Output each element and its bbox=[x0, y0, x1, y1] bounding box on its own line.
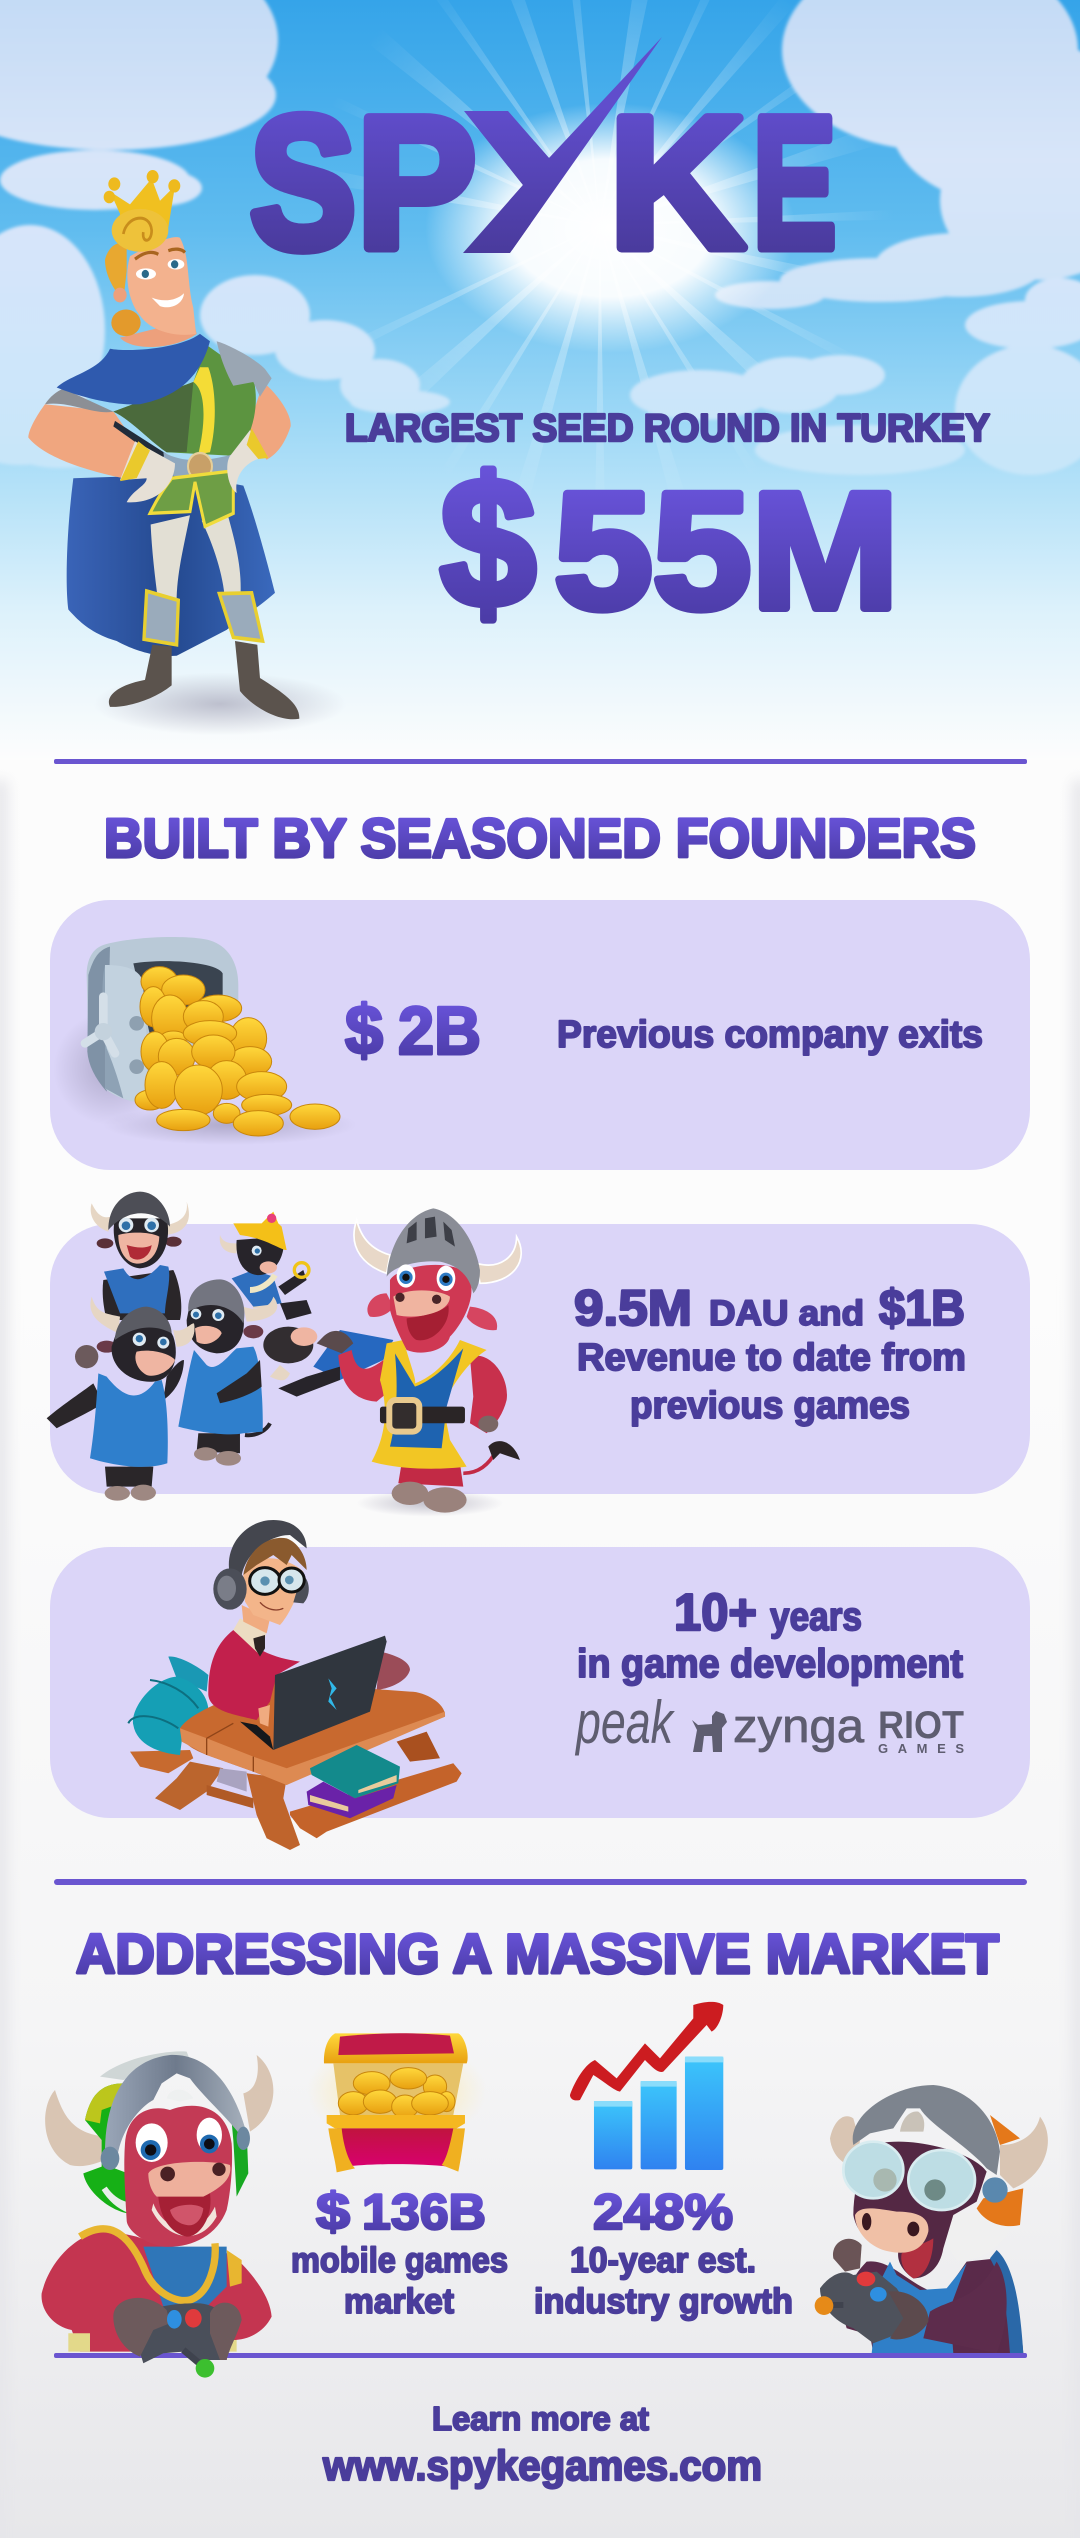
label: mobile games market bbox=[291, 2241, 508, 2321]
logo: SPYKE: P bbox=[356, 78, 476, 288]
logo: SPYKE bbox=[250, 37, 835, 255]
icon: treasure chest bbox=[307, 2033, 487, 2172]
collar and tie bbox=[233, 1618, 267, 1655]
icon: safe with gold coins bbox=[53, 937, 357, 1145]
icon: controller held by red bull bbox=[113, 2298, 242, 2378]
label: previous games: previous games bbox=[630, 1385, 910, 1427]
footer: website url: www.spykegames.com bbox=[322, 2442, 762, 2489]
divider line bbox=[54, 1879, 1027, 1885]
illustration: red pilot bull body bbox=[42, 2051, 273, 2352]
clouds bbox=[0, 0, 1080, 475]
backpack bbox=[168, 1656, 208, 1692]
logo: SPYKE: K bbox=[609, 78, 745, 288]
arms bbox=[28, 404, 148, 478]
stat: $2B: $ bbox=[345, 991, 383, 1069]
illustration: king character bbox=[28, 170, 347, 735]
cape bbox=[67, 474, 275, 656]
stat: 10+ years: years bbox=[770, 1595, 862, 1639]
label: revenue to date: Revenue to date from bbox=[577, 1337, 966, 1379]
label: mobile games market: mobile games bbox=[291, 2241, 508, 2280]
legs bbox=[151, 515, 241, 602]
stat line: DAU and revenue: $1B bbox=[879, 1280, 965, 1336]
big number: $55M bbox=[440, 439, 899, 645]
bull: red knight bbox=[317, 1208, 521, 1517]
illustration: developer at picnic table bbox=[128, 1520, 462, 1850]
belt bbox=[163, 452, 237, 477]
logo: SPYKE: S bbox=[250, 78, 356, 288]
stat: $2B: 2B bbox=[398, 993, 481, 1069]
stat: 10+ years bbox=[674, 1584, 862, 1642]
stat: $136B: $ bbox=[316, 2183, 350, 2241]
logo: Riot Games: RIOT bbox=[878, 1704, 964, 1747]
logo: Riot Games: GAMES bbox=[878, 1741, 964, 1756]
label: mobile games market: market bbox=[344, 2282, 454, 2321]
icon: rising bar chart bbox=[570, 2002, 723, 2170]
boots bbox=[109, 641, 299, 719]
label: industry growth: 10-year est. bbox=[570, 2241, 756, 2280]
logo: SPYKE: E bbox=[752, 78, 836, 288]
panel: previous exits bbox=[50, 900, 1030, 1170]
panel: years in game development bbox=[50, 1520, 1030, 1850]
divider line bbox=[54, 2353, 1027, 2358]
bull: front black bbox=[47, 1297, 194, 1501]
bull: small crowned bbox=[220, 1212, 312, 1320]
gloves bbox=[120, 441, 175, 502]
heading: addressing a massive market: ADDRESSING A MASSIVE MARKET bbox=[76, 1922, 999, 1985]
panel: DAU and revenue bbox=[47, 1192, 1030, 1517]
label: industry growth: industry growth bbox=[534, 2282, 793, 2321]
tunic skirt bbox=[150, 471, 233, 526]
stat: 248%: 248% bbox=[593, 2184, 733, 2240]
illustration: five bulls bbox=[47, 1192, 521, 1517]
label: previous company exits: Previous company exits bbox=[557, 1014, 983, 1056]
logo: peak: peak bbox=[575, 1689, 675, 1756]
heading: largest seed round in Turkey: LARGEST SEED ROUND IN TURKEY bbox=[345, 407, 990, 450]
books bbox=[307, 1782, 397, 1818]
logo: SPYKE: Y bbox=[470, 79, 570, 291]
label: in game development: in game development bbox=[577, 1642, 963, 1686]
stat: $136B: 136B bbox=[362, 2184, 486, 2240]
stat: $2B bbox=[345, 991, 481, 1069]
crown bbox=[110, 178, 175, 245]
heading: built by seasoned founders: BUILT BY SEASONED FOUNDERS bbox=[104, 807, 976, 869]
neck bbox=[120, 319, 197, 347]
face bbox=[127, 237, 196, 335]
stat line: DAU and revenue: DAU and bbox=[709, 1294, 864, 1333]
head and headphones bbox=[243, 1558, 303, 1625]
divider line bbox=[54, 759, 1027, 764]
footer: learn more: Learn more at bbox=[432, 2400, 649, 2437]
bull: lying bbox=[263, 1327, 393, 1397]
stat: 10+ years: 10+ bbox=[674, 1584, 757, 1642]
table top bbox=[180, 1682, 445, 1785]
panel: hero sky bbox=[0, 0, 1080, 760]
stat line: DAU and revenue: 9.5M bbox=[574, 1280, 692, 1336]
laptop bbox=[240, 1722, 273, 1750]
big number: $55M: $ bbox=[440, 439, 536, 645]
label: industry growth bbox=[534, 2241, 793, 2321]
bull: top black bbox=[91, 1192, 189, 1320]
hair bbox=[105, 243, 127, 301]
greaves bbox=[144, 591, 263, 645]
stat line: DAU and revenue bbox=[574, 1280, 965, 1336]
logo: zynga: zynga bbox=[733, 1699, 865, 1752]
icon: controller held by dark bull bbox=[815, 2239, 928, 2343]
torso bbox=[113, 345, 256, 456]
illustration: dark pilot bull body bbox=[830, 2085, 1048, 2353]
bull: middle black bbox=[173, 1279, 277, 1466]
stat: $136B bbox=[316, 2183, 486, 2241]
cape collar bbox=[57, 334, 210, 404]
table legs bbox=[397, 1732, 440, 1762]
big number: $55M: 55M bbox=[554, 459, 899, 644]
sun rays bbox=[308, 0, 895, 520]
sweater bbox=[208, 1630, 300, 1720]
